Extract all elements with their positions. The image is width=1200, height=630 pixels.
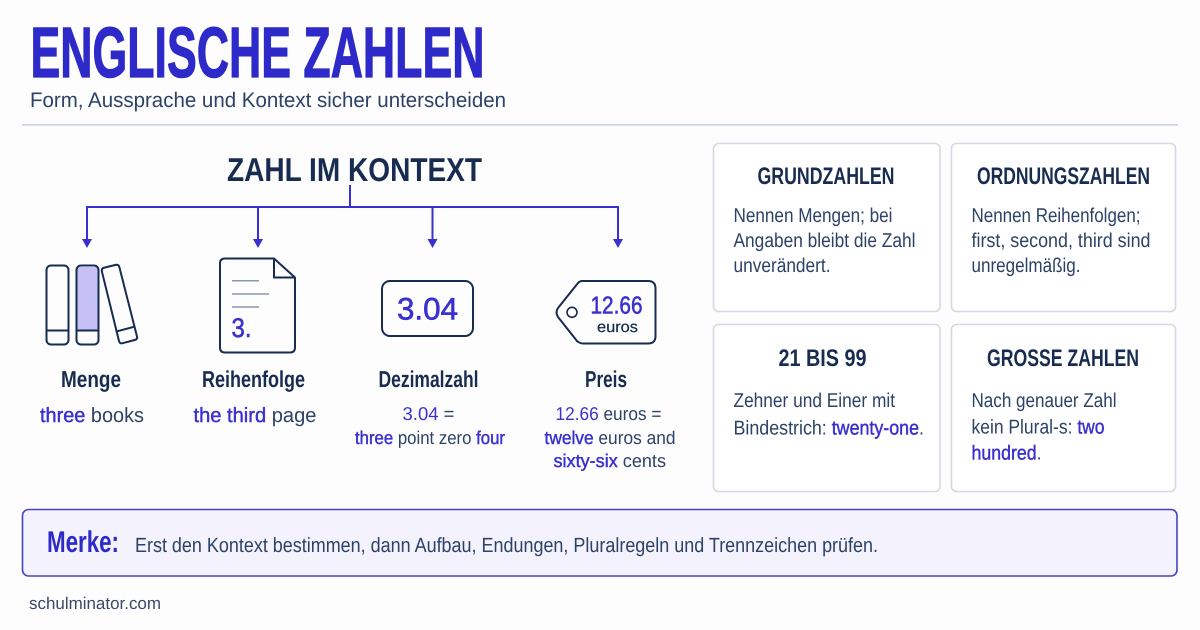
tree connector with arrows <box>82 185 623 248</box>
label: Menge: Menge <box>61 366 121 392</box>
panel: Grosse Zahlen: hundred. <box>972 442 1042 464</box>
panel: Grundzahlen <box>714 144 940 312</box>
icon: price tag <box>556 281 656 344</box>
icon: price tag: euros <box>597 319 638 336</box>
panel: 21 bis 99: Zehner und Einer mit <box>734 390 895 412</box>
label: Preis: sixty-six cents <box>554 450 666 471</box>
footer source: schulminator.com <box>29 594 161 613</box>
callout: Merke: Erst den Kontext bestimmen, dann Aufbau, Endungen, Pluralregeln und Trennzeichen prüfen. <box>135 534 878 557</box>
label: Preis: twelve euros and <box>544 427 676 448</box>
panel: Ordnungszahlen: unregelmäßig. <box>972 255 1080 277</box>
icon: price tag: 12.66 <box>590 292 642 320</box>
document number: 3. <box>232 313 252 343</box>
panel: Grundzahlen: Angaben bleibt die Zahl <box>734 230 916 252</box>
label: Preis: Preis <box>585 366 627 392</box>
label: Preis <box>544 366 676 471</box>
label: Menge <box>40 366 144 427</box>
panel: Ordnungszahlen: first, second, third sind <box>972 230 1150 252</box>
icon: document <box>220 258 295 352</box>
subtitle: Form, Aussprache und Kontext sicher unterscheiden <box>30 89 506 112</box>
callout: Merke <box>22 510 1177 576</box>
icon: books <box>46 265 137 344</box>
title: ENGLISCHE ZAHLEN <box>30 13 485 93</box>
label: Dezimalzahl <box>355 366 505 448</box>
label: Menge: three books <box>40 404 144 427</box>
panel: Grosse Zahlen: Nach genauer Zahl <box>972 390 1116 412</box>
panel: Grundzahlen: Nennen Mengen; bei <box>734 205 892 227</box>
panel: 21 bis 99: Bindestrich: twenty-one. <box>734 418 924 440</box>
label: Dezimalzahl: Dezimalzahl <box>378 366 478 392</box>
panel: 21 bis 99 <box>714 324 940 492</box>
label: Dezimalzahl: 3.04 = <box>402 403 454 424</box>
icon: decimal box: 3.04 <box>397 292 458 326</box>
label: Reihenfolge: Reihenfolge <box>202 366 305 392</box>
panel: Ordnungszahlen: Nennen Reihenfolgen; <box>972 205 1140 227</box>
panel: Grosse Zahlen: GROSSE ZAHLEN <box>987 345 1139 372</box>
label: Reihenfolge: the third page <box>194 404 316 427</box>
panel: Grosse Zahlen: kein Plural-s: two <box>972 416 1104 438</box>
callout: Merke: Merke: <box>47 526 119 559</box>
label: Reihenfolge <box>194 366 316 427</box>
panel: Grundzahlen: unverändert. <box>734 255 830 277</box>
label: Dezimalzahl: three point zero four <box>355 427 505 448</box>
icon: decimal box <box>382 281 473 336</box>
panel: Ordnungszahlen <box>952 144 1176 312</box>
panel: Grosse Zahlen <box>952 324 1176 492</box>
label: Preis: 12.66 euros = <box>556 403 662 424</box>
diagram heading: ZAHL IM KONTEXT <box>227 151 482 188</box>
panel: Grundzahlen: GRUNDZAHLEN <box>758 163 894 190</box>
panel: 21 bis 99: 21 BIS 99 <box>778 345 866 372</box>
